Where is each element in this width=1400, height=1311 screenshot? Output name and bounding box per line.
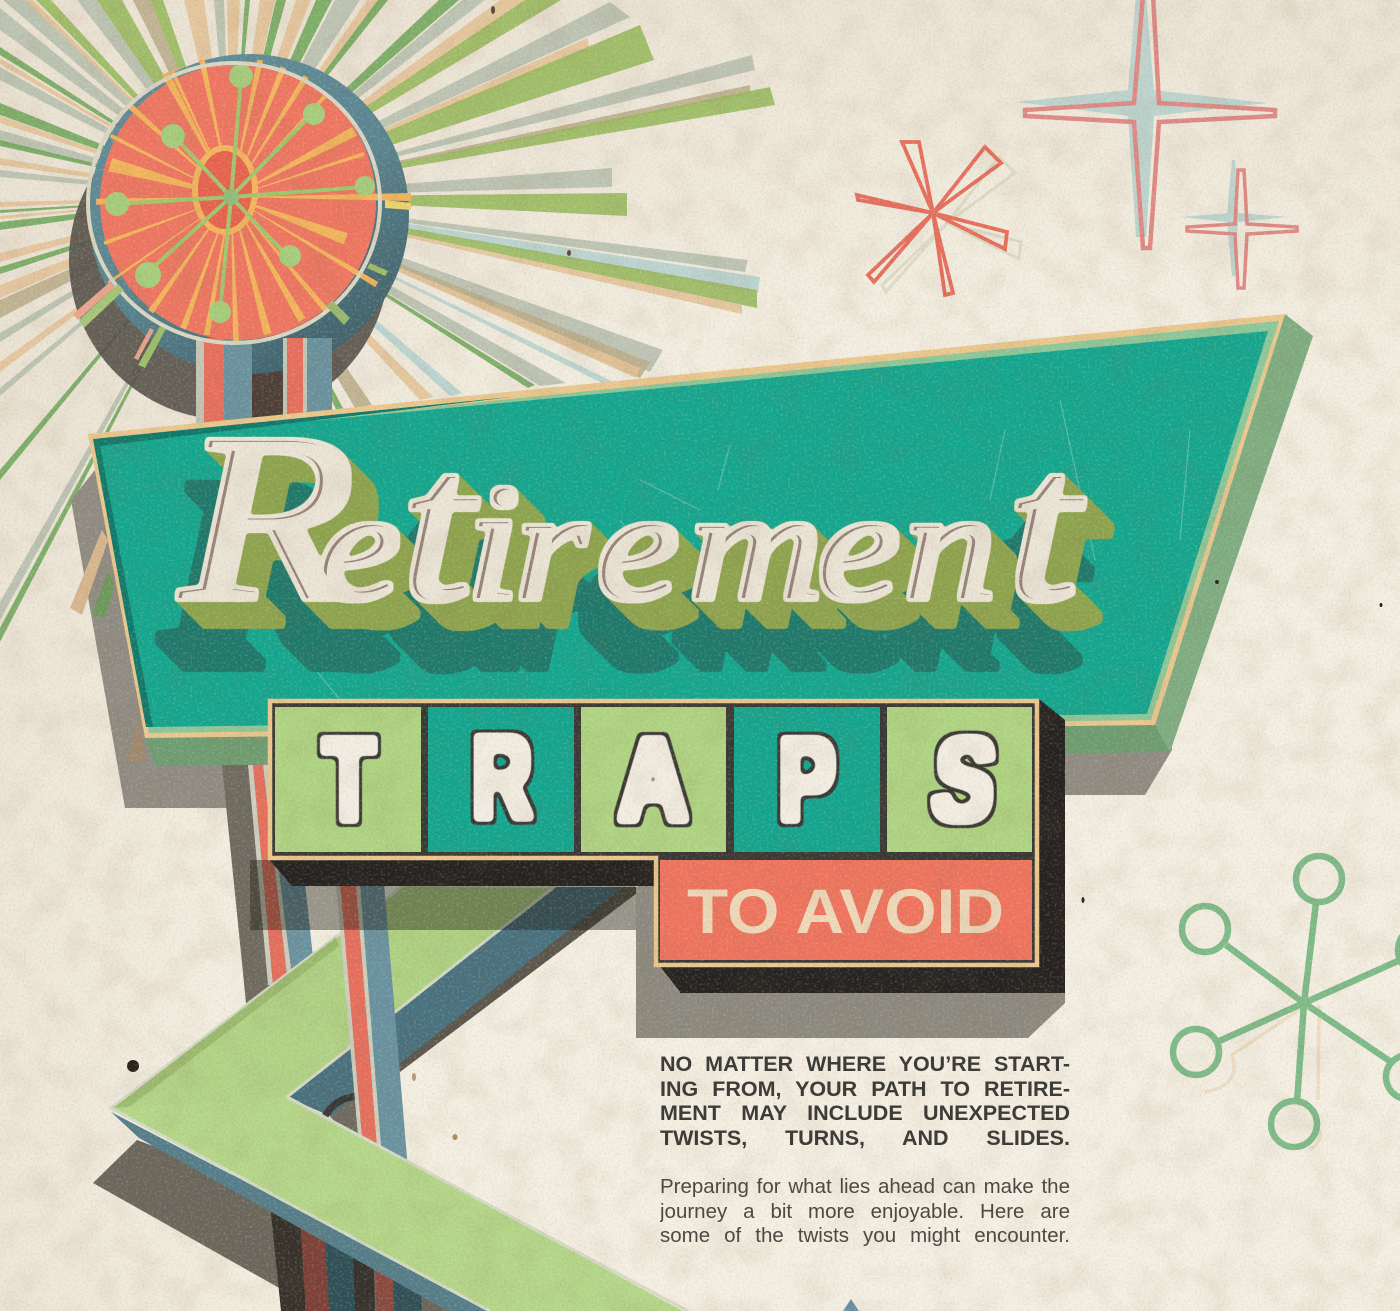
Retirement script lettering: e xyxy=(817,460,900,632)
arrow underside band xyxy=(287,887,645,1150)
lead paragraph xyxy=(660,1052,1070,1150)
crossing ray bars over disc edge xyxy=(73,200,411,368)
lead paragraph: ING FROM, YOUR PATH TO RETIRE- xyxy=(660,1076,1070,1100)
Retirement script lettering: m xyxy=(689,460,823,632)
ray fragments over sign shadow xyxy=(70,530,146,762)
TRAPS lettering xyxy=(323,711,1002,846)
small four-point star xyxy=(1181,160,1297,288)
stem gap shadow xyxy=(250,340,286,440)
paper blemishes xyxy=(127,6,1382,1140)
arrow ground shadow xyxy=(93,1140,462,1311)
red disc xyxy=(100,64,376,340)
TRAPS lettering: T xyxy=(323,713,375,845)
sunburst rays xyxy=(0,0,775,642)
arrow lower arm outlines xyxy=(111,1097,688,1311)
lead paragraph: MENT MAY INCLUDE UNEXPECTED xyxy=(660,1101,1070,1125)
green arrow upper arm xyxy=(111,885,680,1311)
TRAPS box extrusion xyxy=(268,699,1065,993)
arrow upper shaded edge xyxy=(113,937,339,1111)
Retirement script lettering: t xyxy=(1007,407,1084,645)
Retirement script lettering: t xyxy=(401,407,478,645)
large four-point star xyxy=(1017,0,1275,248)
TRAPS lettering: P xyxy=(779,713,835,845)
Retirement script lettering xyxy=(176,385,1084,651)
sign ground shadow xyxy=(71,470,1172,808)
TRAPS lettering: S xyxy=(927,713,1002,846)
Retirement script lettering: r xyxy=(515,460,589,632)
tile P xyxy=(734,707,880,852)
TRAPS lettering: A xyxy=(618,713,688,845)
poles below arrow xyxy=(268,1185,422,1311)
disc centre ring xyxy=(195,148,255,232)
Retirement script lettering: n xyxy=(904,460,997,632)
Retirement script lettering: e xyxy=(318,460,401,632)
body paragraph: Preparing for what lies ahead can make the xyxy=(660,1175,1070,1198)
body paragraph: some of the twists you might encounter. xyxy=(660,1224,1070,1247)
sign stem stripes xyxy=(196,338,332,440)
tile R xyxy=(428,707,574,852)
lead paragraph: NO MATTER WHERE YOU’RE START- xyxy=(660,1052,1070,1076)
letter tiles xyxy=(275,707,1032,852)
bottom edge fragment xyxy=(843,1299,859,1311)
arrow side face xyxy=(111,1112,494,1311)
TO AVOID extrusion corner xyxy=(655,960,1065,993)
tile A xyxy=(581,707,726,852)
tile T xyxy=(275,707,421,852)
body paragraph xyxy=(660,1175,1070,1247)
disc inner rays xyxy=(96,59,411,342)
tile S xyxy=(887,707,1032,852)
disc shadow xyxy=(69,100,389,420)
Retirement script lettering: i xyxy=(466,452,521,634)
asterisk star xyxy=(857,142,1021,295)
TRAPS box frame xyxy=(270,701,1037,965)
lead paragraph: TWISTS, TURNS, AND SLIDES. xyxy=(660,1126,1070,1150)
TRAPS lettering: R xyxy=(472,711,532,843)
Retirement script lettering: R xyxy=(176,385,356,651)
pole shadow xyxy=(222,765,302,1003)
disc green spokes and bulbs xyxy=(105,64,375,323)
Retirement script lettering: e xyxy=(596,460,679,632)
shadow band across poles xyxy=(250,860,636,930)
rear pole stripes xyxy=(248,765,316,985)
main sign xyxy=(88,314,1313,766)
disc white ring xyxy=(88,63,380,343)
green arrow lower arm xyxy=(111,1097,690,1311)
blue disc rim xyxy=(89,54,409,374)
TO AVOID text: TO AVOID xyxy=(687,877,1004,947)
front pole xyxy=(334,860,408,1170)
TO AVOID panel xyxy=(660,860,1032,960)
TRAPS box ground shadow xyxy=(636,880,1065,1038)
body paragraph: journey a bit more enjoyable. Here are xyxy=(660,1200,1070,1223)
atomic snowflake xyxy=(1173,856,1400,1150)
